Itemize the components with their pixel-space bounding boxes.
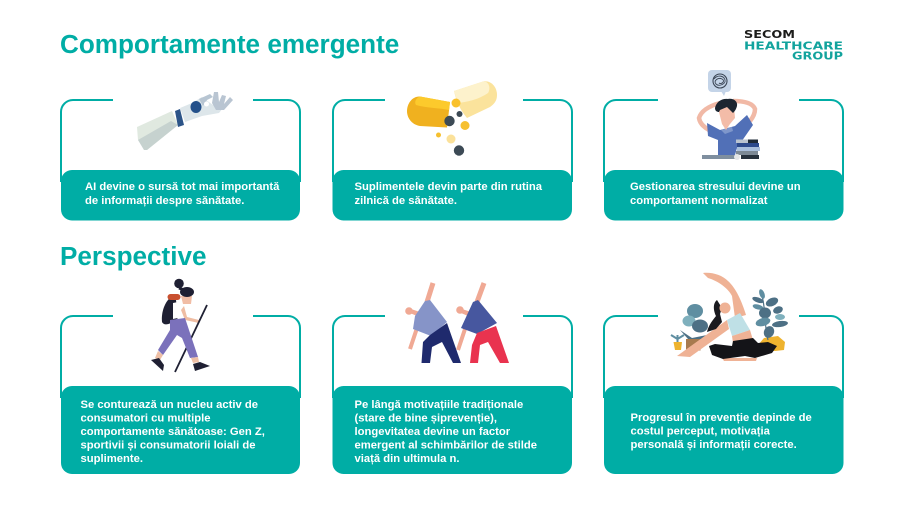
text box: Se conturează un nucleu activ de	[80, 399, 258, 411]
text box: consumatori cu multiple	[80, 412, 211, 424]
panel outline	[333, 316, 572, 398]
panel: longevity	[332, 283, 572, 474]
text box	[332, 170, 572, 220]
panel: AI	[61, 92, 300, 220]
panel: supplements	[332, 81, 572, 220]
icon: yoga pose with plants	[671, 273, 788, 361]
panel outline	[333, 100, 572, 182]
panel outline	[604, 316, 843, 398]
icon: robotic arm	[137, 92, 233, 150]
text box: personală și informații corecte.	[630, 439, 797, 451]
text box: AI devine o sursă tot mai importantă	[85, 181, 280, 193]
panel: prevention	[604, 273, 844, 474]
panel: active consumers	[61, 279, 300, 474]
text box: costul perceput, motivația	[630, 426, 771, 438]
panel outline	[61, 316, 300, 398]
text box: longevitatea devine un factor	[354, 426, 511, 438]
text box: Progresul în prevenție depinde de	[630, 412, 812, 424]
text box: emergent al schimbărilor de stilde	[354, 440, 537, 452]
text box: Suplimentele devin parte din rutina	[354, 181, 543, 193]
panel outline	[604, 100, 843, 182]
logo: Secom Healthcare Group	[744, 28, 843, 62]
title: Comportamente emergente: Comportamente emergente	[60, 29, 399, 59]
panel outline	[61, 100, 300, 182]
icon: hiker with pole	[151, 279, 210, 372]
text box	[61, 386, 300, 474]
text box: Gestionarea stresului devine un	[630, 181, 801, 193]
text box: de informații despre sănătate.	[85, 195, 244, 207]
icon: stressed man with books	[699, 70, 760, 160]
icon: open capsule with vitamins	[407, 81, 497, 156]
icon: two people stretching	[405, 283, 509, 363]
text box: Pe lângă motivațiile tradiționale	[354, 399, 523, 411]
text box	[332, 386, 572, 474]
text box: suplimente.	[80, 453, 143, 465]
text box	[604, 386, 844, 474]
logo: Secom Healthcare Group: GROUP	[792, 50, 843, 62]
logo: Secom Healthcare Group: SECOM	[744, 28, 795, 41]
text box	[604, 170, 844, 220]
text box: zilnică de sănătate.	[354, 195, 457, 207]
text box: viață din ultimula n.	[354, 453, 460, 465]
text box: comportamente sănătoase: Gen Z,	[80, 426, 265, 438]
logo: Secom Healthcare Group: HEALTHCARE	[744, 40, 843, 52]
text box: (stare de bine șiprevenție),	[354, 412, 497, 424]
text box: comportament normalizat	[630, 195, 768, 207]
text box	[61, 170, 300, 220]
text box: sportivii și consumatorii loiali de	[80, 440, 256, 452]
panel: stress	[604, 70, 844, 220]
heading: Perspective: Perspective	[60, 241, 207, 271]
